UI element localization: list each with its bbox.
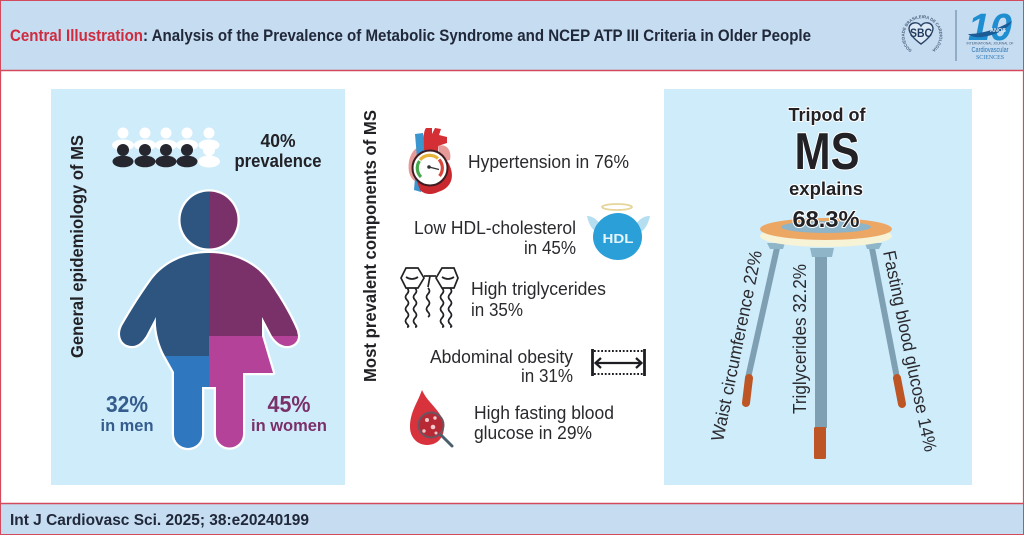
text: fasting glucose: High fasting blood bbox=[474, 403, 614, 423]
item: triglycerides bbox=[401, 268, 606, 327]
logo: journal 10 years: SCIENCES bbox=[976, 54, 1004, 61]
text: triglycerides bbox=[471, 279, 606, 320]
citation: Int J Cardiovasc Sci. 2025; 38:e20240199 bbox=[10, 512, 309, 529]
label: 32% in men: in men bbox=[100, 416, 154, 435]
footer band bbox=[0, 504, 1024, 534]
item: fasting glucose bbox=[410, 390, 614, 446]
label: 45% in women: in women bbox=[251, 416, 327, 435]
header band bbox=[1, 1, 1023, 72]
text: triglycerides: in 35% bbox=[471, 300, 523, 320]
icon: HDL droplet: HDL bbox=[602, 232, 634, 246]
label: 40% prevalence: 40% bbox=[260, 131, 296, 151]
chart: tripod stool bbox=[746, 218, 902, 459]
panel: tripod of MS bbox=[664, 89, 972, 485]
logo: journal 10 years: ANOS bbox=[990, 28, 1006, 34]
logo: journal 10 years: 10 bbox=[968, 7, 1012, 49]
label: 45% in women bbox=[251, 391, 327, 435]
label: 40% prevalence bbox=[234, 131, 322, 171]
icon: triglyceride molecule bbox=[401, 268, 458, 327]
text: fasting glucose bbox=[474, 403, 614, 443]
item: low HDL bbox=[414, 204, 650, 260]
label: fasting blood glucose: Fasting blood glucose 14% bbox=[879, 249, 941, 453]
figure: half man half woman bbox=[120, 192, 298, 448]
heading: tripod of MS explains 68.3% bbox=[788, 105, 867, 232]
logo: SBC: SOCIEDADE BRASILEIRA DE CARDIOLOGIA bbox=[902, 15, 942, 52]
logo: journal 10 years: INTERNATIONAL JOURNAL OF bbox=[966, 40, 1014, 46]
text: abdominal obesity: Abdominal obesity bbox=[430, 347, 573, 367]
heading: tripod of MS explains 68.3%: MS bbox=[794, 123, 860, 181]
text: abdominal obesity: in 31% bbox=[521, 366, 573, 386]
label: waist circumference: Waist circumference 22% bbox=[707, 249, 766, 443]
logo: SBC: SBC bbox=[910, 26, 932, 40]
label: 32% in men: 32% bbox=[106, 391, 148, 417]
text: low HDL: in 45% bbox=[524, 238, 576, 258]
heading: tripod of MS explains 68.3%: Tripod of bbox=[788, 105, 867, 125]
text: triglycerides: High triglycerides bbox=[471, 279, 606, 299]
title: : Analysis of the Prevalence of Metabolic Syndrome and NCEP ATP III Criteria in Older People bbox=[143, 27, 811, 45]
text: hypertension: Hypertension in 76% bbox=[468, 152, 629, 172]
label: triglycerides: Triglycerides 32.2% bbox=[790, 264, 810, 414]
text: low HDL bbox=[414, 218, 576, 258]
label: 32% in men bbox=[100, 391, 154, 435]
heading: general epidemiology of MS: General epidemiology of MS bbox=[67, 135, 87, 358]
icon: blood drop with magnifier bbox=[410, 390, 452, 446]
item: hypertension bbox=[409, 128, 629, 194]
text: abdominal obesity bbox=[430, 347, 573, 386]
logo: journal 10 years bbox=[966, 7, 1014, 61]
heading: tripod of MS explains 68.3%: explains bbox=[789, 179, 863, 199]
label: 40% prevalence: prevalence bbox=[234, 151, 322, 171]
item: abdominal obesity bbox=[430, 347, 644, 386]
logo: journal 10 years: Cardiovascular bbox=[972, 47, 1009, 54]
text: low HDL: Low HDL-cholesterol bbox=[414, 218, 576, 238]
title: Central Illustration bbox=[10, 27, 143, 45]
label: 45% in women: 45% bbox=[268, 391, 310, 417]
icon: heart with gauge bbox=[409, 128, 452, 194]
panel: general epidemiology bbox=[51, 89, 345, 485]
icon: people 40 percent bbox=[112, 128, 220, 168]
icon: HDL droplet bbox=[587, 204, 650, 260]
icon: waist measure arrow bbox=[592, 349, 644, 376]
heading: most prevalent components of MS: Most prevalent components of MS bbox=[360, 110, 380, 382]
heading: tripod of MS explains 68.3%: 68.3% bbox=[792, 206, 860, 232]
text: fasting glucose: glucose in 29% bbox=[474, 423, 592, 443]
